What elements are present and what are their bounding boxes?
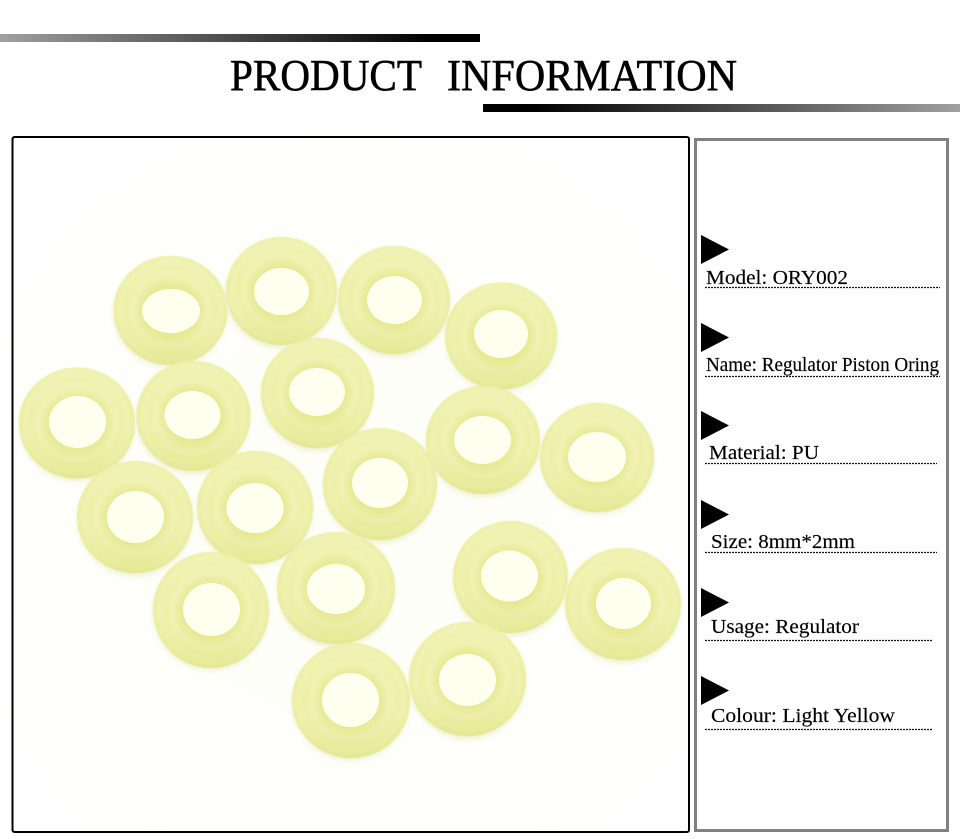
ring 8 [426, 386, 540, 497]
ring 10 [323, 428, 437, 543]
bottom gradient bar [483, 104, 960, 112]
top gradient bar [0, 34, 480, 42]
spec: usage [701, 588, 933, 640]
ring 13 [153, 552, 269, 670]
spec: material: Material: PU [709, 442, 820, 464]
ring 15 [453, 521, 568, 636]
title: INFORMATION [447, 51, 737, 100]
ring 4 [445, 282, 557, 392]
ring 14 [277, 532, 395, 647]
spec: colour: Colour: Light Yellow [711, 705, 896, 727]
spec: usage: Usage: Regulator [711, 616, 859, 638]
spec: material [701, 411, 937, 464]
ring 11 [77, 461, 193, 576]
spec: model: Model: ORY002 [706, 267, 848, 289]
ring 9 [540, 403, 654, 514]
ring 1 [114, 256, 228, 367]
title: PRODUCT [230, 51, 422, 100]
ring 2 [226, 237, 337, 348]
spec: model [701, 235, 940, 289]
spec: size: Size: 8mm*2mm [711, 531, 855, 553]
spec: size [701, 500, 937, 553]
ring 6 [136, 361, 250, 474]
ring 18 [292, 643, 410, 760]
ring 16 [565, 548, 681, 663]
spec: name: Name: Regulator Piston Oring [706, 354, 939, 376]
ring 5 [19, 368, 135, 481]
ring 17 [409, 622, 526, 739]
spec: name [701, 323, 940, 376]
title [230, 51, 737, 100]
panel: product photo [12, 137, 689, 832]
spec: colour [701, 676, 933, 730]
panel: specifications [696, 140, 948, 830]
ring 3 [338, 246, 450, 357]
ring 12 [197, 451, 313, 566]
ring 7 [261, 338, 374, 451]
